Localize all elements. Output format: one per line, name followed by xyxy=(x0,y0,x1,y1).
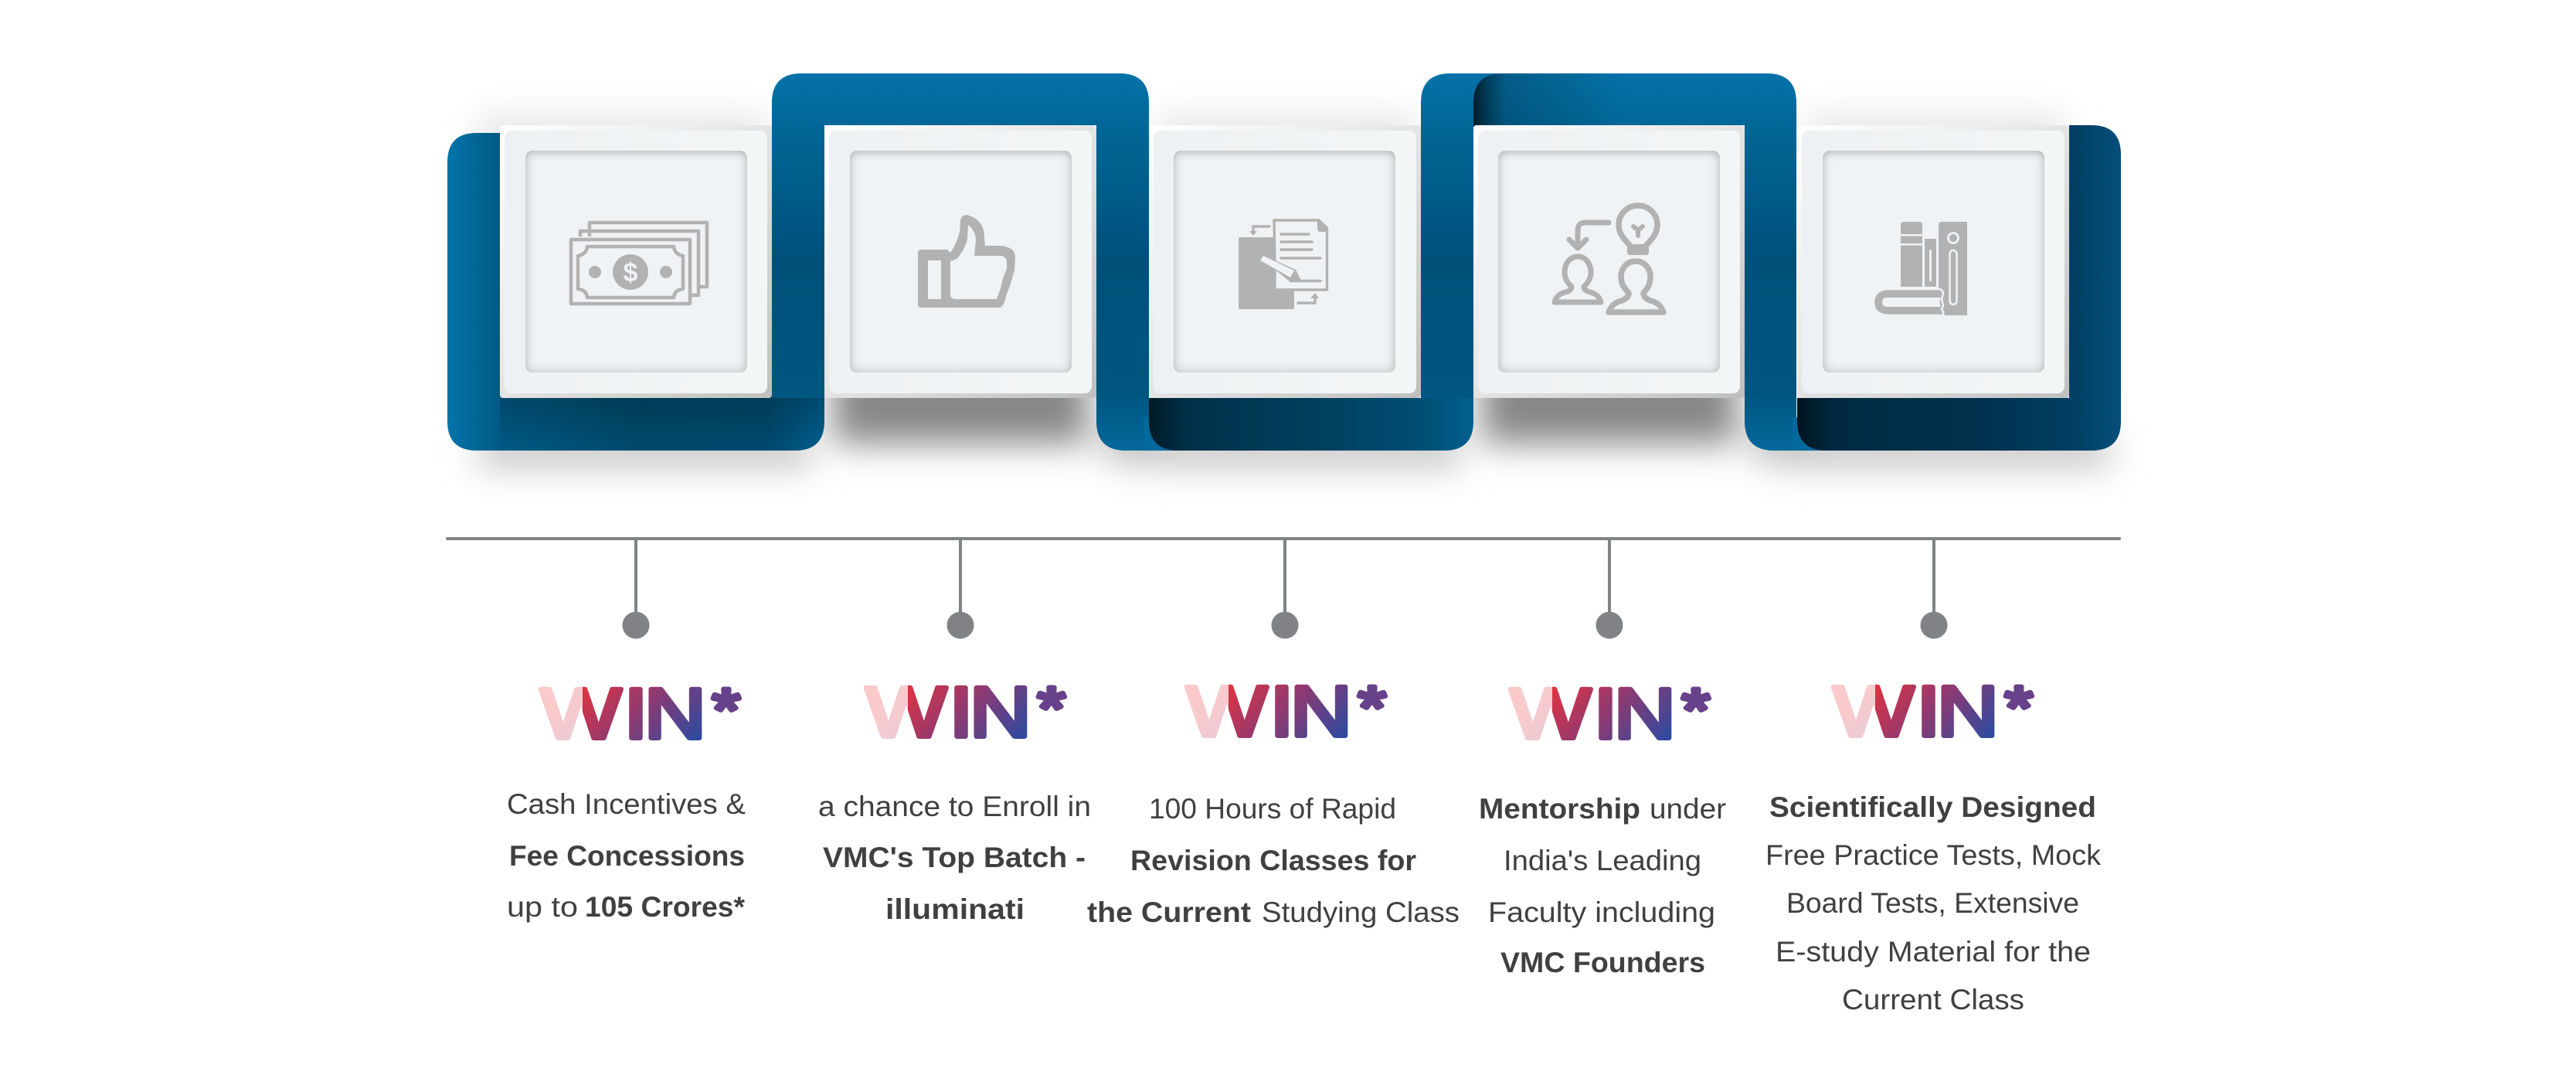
caption 1: up to xyxy=(507,891,578,923)
ribbon segment 4 xyxy=(1421,73,1796,451)
caption 4: VMC Founders xyxy=(1500,947,1705,978)
icon: documents and pencil xyxy=(1239,219,1328,309)
icon: money stack: $ xyxy=(624,258,638,287)
icon: money stack xyxy=(571,223,707,304)
icon: stack of books xyxy=(1874,222,1967,315)
WIN logo 1 xyxy=(533,674,740,754)
icon: thumbs up xyxy=(918,215,1015,308)
WIN logo 4: N xyxy=(1614,674,1676,754)
caption 5: Scientifically Designed xyxy=(1769,791,2096,823)
connector 4 xyxy=(1596,539,1623,638)
WIN logo 5: I xyxy=(1917,672,1940,751)
WIN logo 3: N xyxy=(1290,672,1352,751)
soft shadows around the band xyxy=(479,116,2109,468)
caption 5 xyxy=(1765,791,2101,1015)
caption 4: Mentorship xyxy=(1479,793,1640,825)
WIN logo 5 xyxy=(1826,672,2033,751)
caption 4: Faculty including xyxy=(1488,896,1715,928)
WIN logo 1: N xyxy=(644,674,706,754)
WIN logo 1: I xyxy=(624,674,647,754)
card 3 xyxy=(1149,125,1421,398)
caption 4: India's Leading xyxy=(1504,845,1701,876)
caption 4 xyxy=(1479,793,1726,978)
card 1 xyxy=(500,125,772,398)
caption 2 xyxy=(818,791,1091,925)
timeline horizontal line xyxy=(446,537,2121,540)
caption 2: VMC's Top Batch - xyxy=(823,842,1086,873)
caption 3: the Current xyxy=(1087,896,1251,928)
WIN logo 2: I xyxy=(950,672,973,752)
ribbon segment 1 xyxy=(447,133,824,451)
WIN logo 3 xyxy=(1179,672,1386,751)
caption 3: 100 Hours of Rapid xyxy=(1149,793,1396,825)
caption 3: Revision Classes for xyxy=(1130,845,1416,876)
WIN logo 5: N xyxy=(1937,672,1999,751)
connector 1 xyxy=(623,539,649,638)
WIN logo 4: * xyxy=(1682,676,1710,743)
caption 1: 105 Crores* xyxy=(585,891,746,923)
WIN logo 4: W xyxy=(1511,674,1591,754)
caption 4: under xyxy=(1650,793,1726,825)
caption 5: Free Practice Tests, Mock xyxy=(1765,839,2101,871)
caption 5: Board Tests, Extensive xyxy=(1786,887,2079,919)
card 2 xyxy=(824,125,1096,398)
WIN logo 3: * xyxy=(1358,674,1386,741)
WIN logo 4 xyxy=(1503,674,1710,754)
connector 5 xyxy=(1921,539,1947,638)
ribbon segment 3 xyxy=(1144,398,1473,451)
WIN logo 3: W xyxy=(1187,672,1267,751)
caption 3 xyxy=(1087,793,1460,928)
WIN logo 3: I xyxy=(1270,672,1293,751)
caption 1: Fee Concessions xyxy=(509,840,745,872)
WIN logo 2: * xyxy=(1038,675,1065,742)
connector 3 xyxy=(1272,539,1298,638)
WIN logo 5: * xyxy=(2005,674,2033,741)
card 4 xyxy=(1473,125,1745,398)
caption 5: Current Class xyxy=(1842,984,2024,1015)
caption 5: E-study Material for the xyxy=(1776,936,2091,968)
caption 1: Cash Incentives & xyxy=(507,788,746,820)
WIN logo 1: W xyxy=(541,674,621,754)
caption 1 xyxy=(507,788,746,923)
caption 3: Studying Class xyxy=(1262,896,1460,928)
icon: mentor with lightbulb xyxy=(1555,206,1664,312)
WIN logo 2: W xyxy=(866,672,946,752)
connector 2 xyxy=(947,539,974,638)
WIN logo 4: I xyxy=(1594,674,1617,754)
caption 2: illuminati xyxy=(885,893,1025,925)
WIN logo 1: * xyxy=(712,676,740,743)
caption 2: a chance to Enroll in xyxy=(818,791,1091,822)
card 5 xyxy=(1797,125,2069,398)
ribbon segment 5 xyxy=(1793,125,2121,451)
ribbon segment 2 xyxy=(772,73,1149,451)
WIN logo 2: N xyxy=(970,672,1031,752)
WIN logo 5: W xyxy=(1833,672,1914,751)
WIN logo 2 xyxy=(858,672,1065,752)
